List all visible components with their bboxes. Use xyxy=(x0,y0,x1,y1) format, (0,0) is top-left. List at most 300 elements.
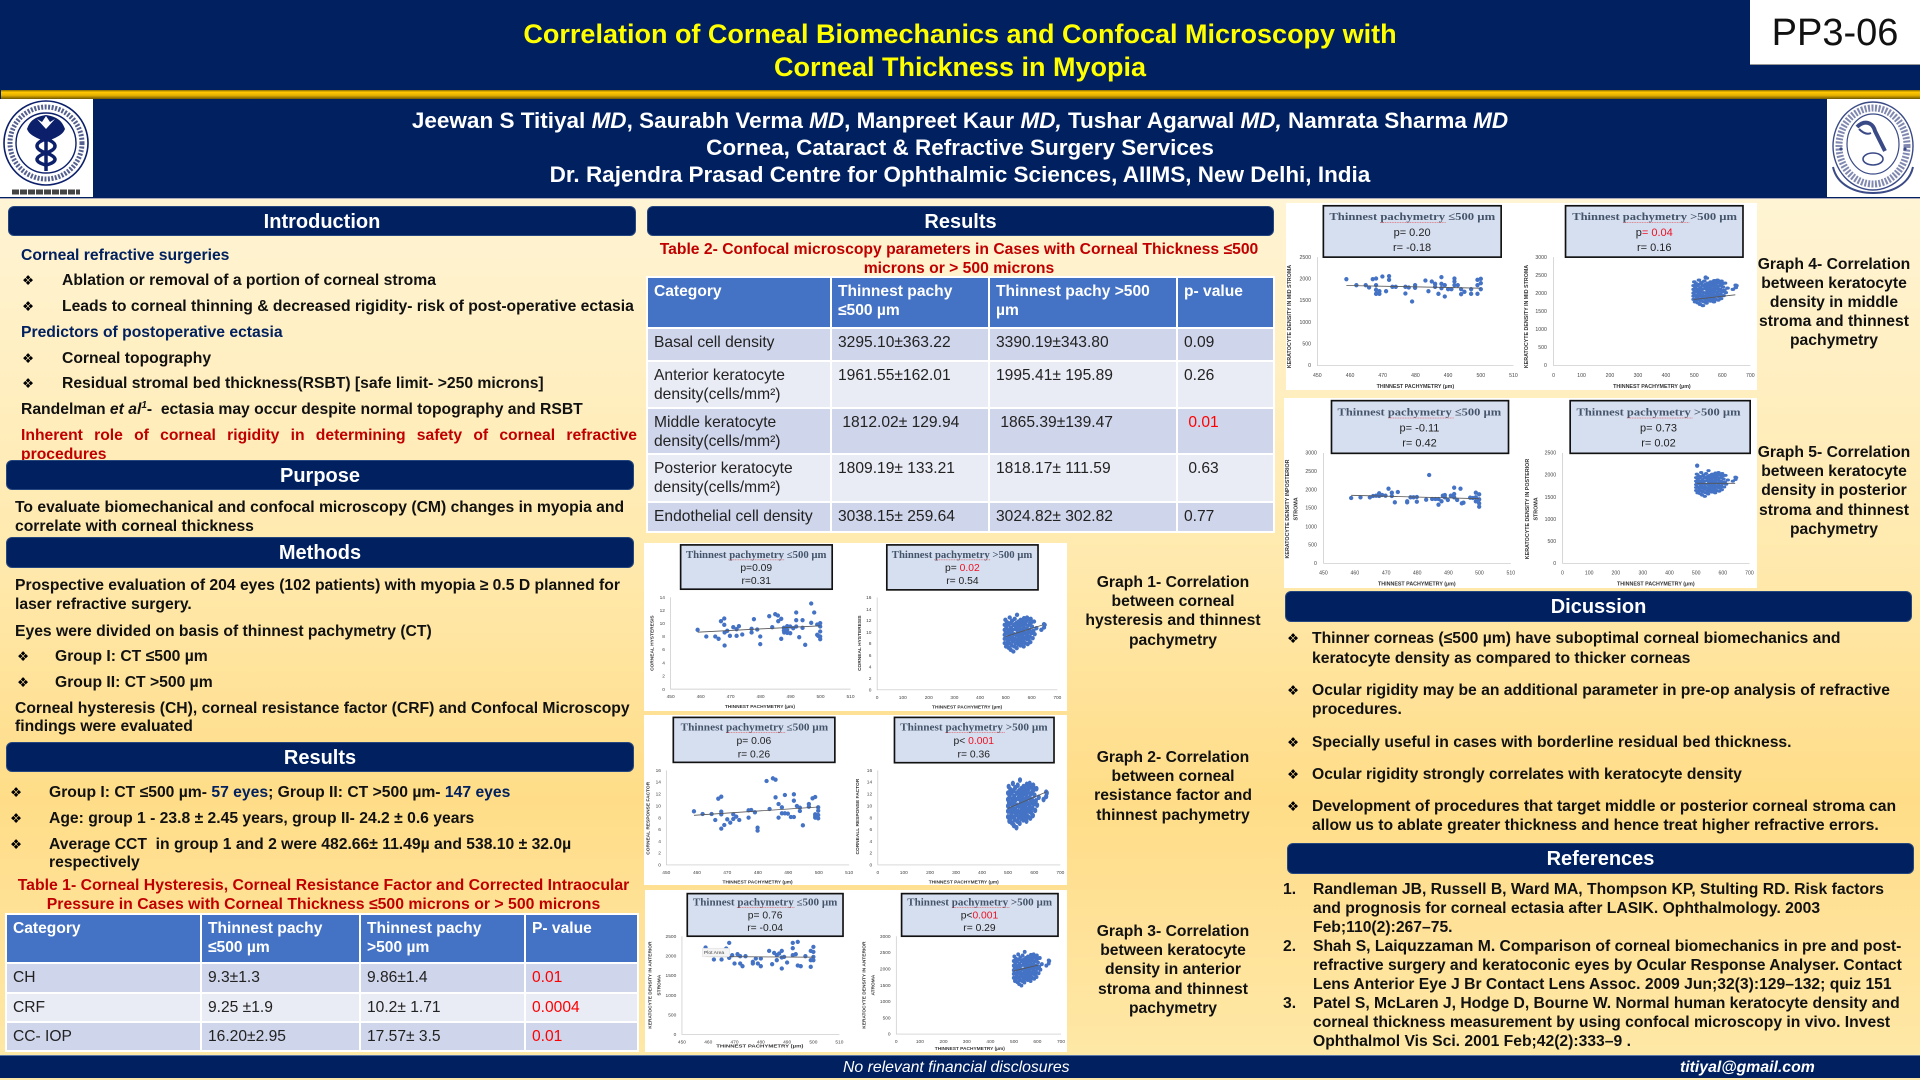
graph 3 left axes: STROMA xyxy=(656,974,662,996)
graph 5 left axes: STROMA xyxy=(1294,497,1300,521)
table 1: 16.20±2.95 xyxy=(208,1028,286,1045)
text block: references: Feb;110(2):267–75. xyxy=(1313,919,1453,936)
graph 1 right axes: 4 xyxy=(869,664,872,670)
graph 3 left axes: 500 xyxy=(809,1039,818,1045)
graph 5 left axes: 3000 xyxy=(1305,451,1317,457)
graph 1 right axes: 8 xyxy=(869,641,872,647)
text block: discussion: Specially useful in cases with borderline residual bed thickness. xyxy=(1312,734,1792,751)
graph 5 right axes: 2500 xyxy=(1545,451,1556,457)
graph 5 left axes: 500 xyxy=(1475,570,1484,576)
disclosure note: No relevant financial disclosures xyxy=(843,1059,1070,1076)
graph 1 right axes: 0 xyxy=(869,687,872,693)
graph 1 left axes: 470 xyxy=(727,694,735,700)
graph 5 right axes: THINNEST PACHYMETRY (µm) xyxy=(1617,581,1695,587)
graph 2 caption: between corneal xyxy=(1112,768,1234,785)
graph 3 left axes: 460 xyxy=(704,1039,713,1045)
graph 5 left axes: 450 xyxy=(1319,570,1328,576)
graph 5 right axes: 600 xyxy=(1719,570,1727,576)
graph 1 right axes: 200 xyxy=(925,695,933,701)
graph 5 left stats box: r= 0.42 xyxy=(1402,438,1437,450)
graph 2 left axes xyxy=(645,768,854,886)
text block: discussion: ❖ xyxy=(1287,683,1299,699)
graph 5 left stats box: Thinnest pachymetry ≤500 µm xyxy=(1338,407,1501,419)
authors and affiliation xyxy=(412,108,1508,187)
graph 1 right axes: 100 xyxy=(899,695,907,701)
heading: Results middle: Results xyxy=(924,211,997,233)
graph 4 right stats box: r= 0.16 xyxy=(1637,242,1672,254)
table 2 caption: microns or > 500 microns xyxy=(864,260,1054,277)
title: Corneal Thickness in Myopia xyxy=(774,52,1146,82)
heading: References xyxy=(1287,843,1914,874)
graph 4 right axes: 1500 xyxy=(1535,309,1547,315)
graph 2 right axes: 200 xyxy=(926,870,934,876)
text block: results xyxy=(10,784,571,871)
graph 5 caption: stroma and thinnest xyxy=(1759,502,1909,519)
graph 2 left axes: 470 xyxy=(723,870,732,876)
heading: Methods xyxy=(6,537,634,568)
graph 2 right stats box: r= 0.36 xyxy=(958,749,990,760)
graph 4 right axes: 200 xyxy=(1606,373,1614,379)
graph 4 left stats box xyxy=(1323,206,1501,257)
graph 5 right axes: 1000 xyxy=(1545,517,1556,523)
graph 4 right axes: 500 xyxy=(1538,345,1547,351)
graph 5 right axes: 0 xyxy=(1561,570,1564,576)
graph 1 left stats box: p=0.09 xyxy=(740,563,772,574)
graph 4 right stats box xyxy=(1566,206,1743,257)
text block: discussion: ❖ xyxy=(1287,735,1299,751)
graph 1 left axes: 8 xyxy=(662,634,665,640)
text block: results: ❖ xyxy=(10,837,22,853)
text block: introduction: Ablation or removal of a portion of corneal stroma xyxy=(62,272,436,289)
graph 4 caption: between keratocyte xyxy=(1761,275,1907,292)
graph 4 left stats box: r= -0.18 xyxy=(1393,242,1431,254)
graph 2 right axes: 4 xyxy=(869,839,872,845)
table 1 xyxy=(5,913,639,1052)
graph 2 left axes: 450 xyxy=(662,870,671,876)
graph 3 caption: stroma and thinnest xyxy=(1098,981,1248,998)
graph 4 caption: density in middle xyxy=(1770,294,1898,311)
graph 2 right axes: 2 xyxy=(869,851,872,857)
graph 3 caption: density in anterior xyxy=(1105,961,1241,978)
graph 3 right axes: 2500 xyxy=(880,950,891,956)
title xyxy=(523,19,1397,82)
graph 4 left axes: KERATOCYTE DENSITY IN MID STROMA xyxy=(1287,265,1293,368)
graph 4 left axes: 460 xyxy=(1346,373,1354,379)
graph 3 right stats box: Thinnest pachymetry >500 µm xyxy=(907,898,1053,909)
graph 5 right axes: 500 xyxy=(1692,570,1701,576)
graph 4 right axes: THINNEST PACHYMETRY (µm) xyxy=(1613,384,1691,390)
graph 3 panel xyxy=(645,890,1067,1052)
graph 3 caption: between keratocyte xyxy=(1100,942,1246,959)
graph 4 left stats box: Thinnest pachymetry ≤500 µm xyxy=(1329,211,1495,223)
graph 1 right axes: 12 xyxy=(866,618,872,624)
graph 5 right stats box: r= 0.02 xyxy=(1641,438,1676,450)
graph 4 left scatter xyxy=(1346,276,1481,302)
graph 1 left axes: 480 xyxy=(757,694,765,700)
graph 2 left axes: 14 xyxy=(656,780,661,786)
text block: references: corneal thickness measurement by using confocal microscopy in vivo. Invest xyxy=(1313,1014,1890,1031)
table 1: >500 µm xyxy=(367,939,429,956)
text block: references: refractive surgery and keratoconic eyes by Ocular Response Analyser. Contact xyxy=(1313,957,1902,974)
graph 2 left stats box: p= 0.06 xyxy=(737,736,772,747)
graph 1 right axes xyxy=(857,595,1062,710)
graph 3 right axes: 300 xyxy=(963,1039,971,1045)
heading: Purpose: Purpose xyxy=(280,465,360,487)
graph 1 right axes: 6 xyxy=(869,653,872,659)
graph 2 caption: Graph 2- Correlation xyxy=(1097,749,1249,766)
text block: discussion: Thinner corneas (≤500 µm) have suboptimal corneal biomechanics and xyxy=(1312,630,1841,647)
graph 1 left axes: 14 xyxy=(660,595,665,601)
graph 2 left axes: 12 xyxy=(656,792,661,798)
graph 3 caption: pachymetry xyxy=(1129,1000,1217,1017)
graph 1 right axes: 600 xyxy=(1028,695,1036,701)
graph 3 caption xyxy=(1097,923,1249,1017)
graph 3 left axes: KERATOCYTE DENSITY IN ANTERIOR xyxy=(647,941,653,1029)
graph 5 right axes xyxy=(1525,451,1754,587)
table 2: 0.01 xyxy=(1188,414,1219,431)
graph 2 left axes: 4 xyxy=(658,839,661,845)
authors and affiliation: Dr. Rajendra Prasad Centre for Ophthalmic Sciences, AIIMS, New Delhi, India xyxy=(550,162,1370,187)
text block: methods: Corneal hysteresis (CH), corneal resistance factor (CRF) and Confocal Microscopy xyxy=(15,700,630,717)
graph 4 caption xyxy=(1758,256,1910,349)
graph 1 left axes: 12 xyxy=(660,608,665,614)
text block: purpose: correlate with corneal thickness xyxy=(15,518,254,535)
table 1: 9.3±1.3 xyxy=(208,969,260,986)
text block: references xyxy=(1283,881,1902,1050)
graph 2 left axes: 10 xyxy=(656,803,661,809)
graph 3 right axes: ATROMA xyxy=(870,974,876,996)
graph 5 caption: between keratocyte xyxy=(1761,463,1907,480)
graph 5 left stats box: p= -0.11 xyxy=(1400,422,1439,434)
graph 3 left axes xyxy=(647,934,844,1045)
table 2: Basal cell density xyxy=(654,334,774,351)
graph 1 left axes: CORNEAL HYSTERESIS xyxy=(650,615,656,671)
graph 4 right axes: 500 xyxy=(1690,373,1699,379)
table 1 caption: Pressure in Cases with Corneal Thickness ≤500 microns or > 500 microns xyxy=(47,896,600,912)
graph 2 caption: thinnest pachymetry xyxy=(1096,807,1250,824)
graph 3 left stats box: Thinnest pachymetry ≤500 µm xyxy=(693,898,838,909)
graph 3 left axes: 2500 xyxy=(666,934,677,940)
graph 4 right stats box: Thinnest pachymetry >500 µm xyxy=(1572,211,1737,223)
heading: Results left: Results xyxy=(284,747,356,769)
logo: RP Centre emblem xyxy=(1827,99,1920,197)
graph 5 left axes: 2000 xyxy=(1305,487,1317,493)
graph 3 right axes: 0 xyxy=(888,1032,891,1038)
poster id box xyxy=(1750,0,1920,65)
text block: methods xyxy=(15,577,630,735)
text block: introduction xyxy=(21,247,637,460)
text block: introduction: ❖ xyxy=(22,273,34,289)
table 2: 1865.39±139.47 xyxy=(1000,414,1113,431)
heading: Results middle xyxy=(647,206,1274,236)
graph 4 left axes: 480 xyxy=(1411,373,1420,379)
text block: references: Lens Anterior Eye J Br Contact Lens Assoc. 2009 Jun;32(3):129–132; quiz 151 xyxy=(1313,976,1892,993)
title: Correlation of Corneal Biomechanics and Confocal Microscopy with xyxy=(523,19,1397,49)
graph 2 left stats box: Thinnest pachymetry ≤500 µm xyxy=(681,722,829,733)
graph 2 left axes: CORNEAL RESPONSE FACTOR xyxy=(645,781,651,855)
table 1: CRF xyxy=(13,999,45,1016)
text block: references: Patel S, McLaren J, Hodge D, Bourne W. Normal human keratocyte density and xyxy=(1313,995,1900,1012)
graph 3 left axes: 2000 xyxy=(666,954,677,960)
graph 4 right axes: 1000 xyxy=(1535,327,1547,333)
graph 4 left axes xyxy=(1287,255,1518,390)
gold divider bar xyxy=(1,90,1920,99)
table 2: 0.77 xyxy=(1184,508,1214,525)
graph 2 right axes: 6 xyxy=(869,827,872,833)
poster id box: PP3-06 xyxy=(1772,12,1898,54)
graph 3 right axes: 3000 xyxy=(880,934,891,940)
graph 1 right axes: 16 xyxy=(866,595,872,601)
graph 4 right axes: KERATOCYTE DENSITY IN MID STROMA xyxy=(1524,265,1530,368)
graph 3 left axes: 0 xyxy=(674,1032,677,1038)
graph 3 right axes: 200 xyxy=(940,1039,948,1045)
table 2: Category xyxy=(654,283,722,300)
graph 3 right axes: 500 xyxy=(1010,1039,1018,1045)
graph 5 right axes: 300 xyxy=(1639,570,1647,576)
graph 5 right axes: 700 xyxy=(1745,570,1754,576)
graph 3 plot area tooltip xyxy=(702,948,730,957)
text block: introduction: ❖ xyxy=(22,376,34,392)
table 1 caption xyxy=(18,877,630,912)
graph 5 right scatter xyxy=(1696,471,1736,496)
text block: discussion: procedures. xyxy=(1312,701,1402,718)
table 2 caption: Table 2- Confocal microscopy parameters in Cases with Corneal Thickness ≤500 xyxy=(660,241,1258,258)
graph 5 left scatter xyxy=(1351,475,1479,507)
graph 5 right axes: 0 xyxy=(1553,561,1556,567)
text block: introduction: Inherent role of corneal rigidity in determining safety of corneal refractive xyxy=(21,427,637,444)
graph 4 left axes: 510 xyxy=(1509,373,1518,379)
text block: results: Average CCT in group 1 and 2 were 482.66± 11.49µ and 538.10 ± 32.0µ xyxy=(49,836,571,853)
graph 1 right axes: 500 xyxy=(1002,695,1010,701)
graph 4 right axes: 600 xyxy=(1718,373,1727,379)
graph 2 left scatter xyxy=(694,778,818,831)
graph 4 panel xyxy=(1286,203,1757,390)
graph 2 left axes: 460 xyxy=(693,870,701,876)
table 2: 1818.17± 111.59 xyxy=(996,460,1111,477)
logo: AIIMS emblem xyxy=(0,99,93,197)
graph 1 caption: Graph 1- Correlation xyxy=(1097,574,1249,591)
graph 4 right axes: 100 xyxy=(1577,373,1586,379)
graph 4 right axes: 300 xyxy=(1634,373,1642,379)
graph 1 left axes: 4 xyxy=(662,660,665,666)
graph 1 right axes: 700 xyxy=(1053,695,1062,701)
text block: discussion: ❖ xyxy=(1287,767,1299,783)
table 1: 0.01 xyxy=(532,969,562,986)
graph 5 right stats box: Thinnest pachymetry >500 µm xyxy=(1576,407,1741,419)
graph 2 right axes xyxy=(855,768,1065,886)
text block: references: 3. xyxy=(1283,995,1296,1012)
header band xyxy=(0,0,1920,199)
graph 1 right axes: 10 xyxy=(866,630,872,636)
text block: discussion: ❖ xyxy=(1287,799,1299,815)
table 2: µm xyxy=(996,302,1019,319)
graph 2 right axes: 100 xyxy=(900,870,908,876)
graph 4 right axes: 400 xyxy=(1662,373,1670,379)
graph 4 left axes: 500 xyxy=(1302,342,1311,348)
graph 5 right axes: 2000 xyxy=(1545,473,1556,479)
graph 4 right axes xyxy=(1524,255,1755,390)
graph 2 right axes: 8 xyxy=(869,815,872,821)
graph 3 right stats box xyxy=(902,894,1058,936)
text block: discussion xyxy=(1287,630,1896,834)
text block: discussion: Ocular rigidity may be an additional parameter in pre-op analysis of refractive xyxy=(1312,682,1890,699)
table 2: Endothelial cell density xyxy=(654,508,813,525)
table 2: density(cells/mm²) xyxy=(654,479,780,496)
text block: introduction: Leads to corneal thinning & decreased rigidity- risk of post-operative ectasia xyxy=(62,298,634,315)
graph 5 right axes: KERATOCYTE DENSITY IN POSTERIOR xyxy=(1525,459,1531,559)
table 1: Category xyxy=(13,920,81,937)
graph 3 right stats box: p<0.001 xyxy=(961,911,998,922)
graph 5 panel xyxy=(1284,398,1757,588)
graph 3 left stats box: p= 0.76 xyxy=(748,911,783,922)
graph 5 right stats box: p= 0.73 xyxy=(1640,422,1677,434)
graph 2 left stats box xyxy=(673,717,835,762)
graph 5 left axes: 500 xyxy=(1308,543,1317,549)
graph 4 right scatter xyxy=(1694,278,1736,306)
table 1: CC- IOP xyxy=(13,1028,72,1045)
text block: introduction: Corneal refractive surgeries xyxy=(21,247,229,264)
text block: methods: laser refractive surgery. xyxy=(15,596,192,613)
graph 5 right axes: 400 xyxy=(1665,570,1674,576)
table 2 caption xyxy=(660,241,1258,277)
graph 2 right scatter xyxy=(1008,780,1047,828)
table 1: 9.25 ±1.9 xyxy=(208,999,273,1016)
table 2: 1809.19± 133.21 xyxy=(838,460,955,477)
table 2: density(cells/mm²) xyxy=(654,386,780,403)
table 2: 0.63 xyxy=(1188,460,1219,477)
graph 1 right axes: 0 xyxy=(876,695,879,701)
graph 3 right axes: 0 xyxy=(895,1039,898,1045)
text block: references: Randleman JB, Russell B, Ward MA, Thompson KP, Stulting RD. Risk factors xyxy=(1313,881,1884,898)
graph 4 left axes: 500 xyxy=(1476,373,1485,379)
graph 4 right axes: 0 xyxy=(1552,373,1555,379)
text block: references: 2. xyxy=(1283,938,1296,955)
graph 5 left axes: 1000 xyxy=(1305,524,1317,530)
graph 5 right axes: 1500 xyxy=(1545,495,1556,501)
text block: results: Group I: CT ≤500 µm- 57 eyes; Group II: CT >500 µm- 147 eyes xyxy=(49,784,510,801)
text block: introduction: Randelman et al1- ectasia may occur despite normal topography and RSBT xyxy=(21,400,583,418)
graph 1 right axes: 14 xyxy=(866,607,872,613)
graph 3 left stats box: r= -0.04 xyxy=(747,923,783,934)
graph 1 left stats box xyxy=(681,545,832,589)
graph 2 panel xyxy=(644,715,1067,885)
table 1: Thinnest pachy xyxy=(367,920,481,937)
text block: methods: Group I: CT ≤500 µm xyxy=(55,648,208,665)
graph 2 left axes: 0 xyxy=(658,863,661,869)
text block: purpose: To evaluate biomechanical and confocal microscopy (CM) changes in myopia and xyxy=(15,499,624,516)
graph 1 right stats box xyxy=(887,545,1038,590)
graph 1 right stats box: r= 0.54 xyxy=(946,576,979,587)
text block: discussion: ❖ xyxy=(1287,631,1299,647)
graph 1 left axes xyxy=(650,595,855,710)
graph 5 left axes: KERATOCYTE DENSITY INPOSTERIOR xyxy=(1285,459,1291,558)
table 2: 0.09 xyxy=(1184,334,1214,351)
graph 4 left stats box: p= 0.20 xyxy=(1394,227,1431,239)
graph 2 right axes: 400 xyxy=(978,870,986,876)
text block: introduction: ❖ xyxy=(22,299,34,315)
text block: references: 1. xyxy=(1283,881,1296,898)
text block: methods: ❖ xyxy=(17,649,29,665)
heading: Methods: Methods xyxy=(279,542,361,564)
graph 5 left axes: 1500 xyxy=(1305,506,1317,512)
graph 1 left axes: 490 xyxy=(787,694,795,700)
graph 1 left axes: 510 xyxy=(846,694,855,700)
graph 5 left axes: 0 xyxy=(1314,561,1317,567)
graph 3 right axes: 1000 xyxy=(880,999,891,1005)
graph 5 left axes: 510 xyxy=(1507,570,1515,576)
graph 2 right axes: 10 xyxy=(867,803,872,809)
graph 1 left stats box: Thinnest pachymetry ≤500 µm xyxy=(686,550,827,561)
heading: Introduction: Introduction xyxy=(264,211,380,233)
graph 1 left axes: THINNEST PACHYMETRY (µm) xyxy=(725,704,795,710)
graph 1 left axes: 10 xyxy=(660,621,665,627)
graph 3 right axes: 2000 xyxy=(880,967,891,973)
text block: discussion: allow us to ablate greater thickness and hence treat higher refractive errors. xyxy=(1312,817,1879,834)
graph 3 left x-axis title: THINNEST PACHYMETRY (µm) xyxy=(716,1044,804,1050)
graph 5 caption xyxy=(1758,444,1910,538)
graph 2 left axes: 16 xyxy=(656,768,661,774)
graph 2 right axes: 0 xyxy=(869,863,872,869)
graph 1 left scatter xyxy=(698,604,820,645)
text block: introduction: ❖ xyxy=(22,351,34,367)
heading: Discussion xyxy=(1285,591,1912,622)
table 1: 0.0004 xyxy=(532,999,580,1016)
graph 1 caption xyxy=(1085,574,1261,649)
graph 4 left axes: 2000 xyxy=(1300,276,1311,282)
graph 2 caption xyxy=(1094,749,1252,824)
graph 3 left axes: 500 xyxy=(668,1012,677,1018)
graph 4 caption: pachymetry xyxy=(1790,332,1878,349)
text block: references: Ophthalmol Vis Sci. 2001 Feb;42(2):333–9 . xyxy=(1313,1033,1631,1050)
text block: results: ❖ xyxy=(10,811,22,827)
graph 3 left axes: 470 xyxy=(731,1039,739,1045)
graph 5 left axes: 490 xyxy=(1444,570,1453,576)
table 1: 9.86±1.4 xyxy=(367,969,428,986)
graph 5 left axes: 470 xyxy=(1382,570,1391,576)
table 2: Posterior keratocyte xyxy=(654,460,793,477)
heading: References: References xyxy=(1547,848,1654,870)
graph 3 right axes: 400 xyxy=(986,1039,995,1045)
graph 4 left axes: THINNEST PACHYMETRY (µm) xyxy=(1377,384,1454,390)
graph 5 caption: pachymetry xyxy=(1790,521,1878,538)
graph 2 right axes: 300 xyxy=(952,870,960,876)
table 2: 1961.55±162.01 xyxy=(838,367,951,384)
graph 5 left axes xyxy=(1285,451,1515,587)
graph 2 right axes: 600 xyxy=(1030,870,1039,876)
text block: introduction: Predictors of postoperative ectasia xyxy=(21,324,283,341)
table 1: P- value xyxy=(532,920,592,937)
graph 3 right stats box: r= 0.29 xyxy=(963,923,996,934)
graph 1 caption: hysteresis and thinnest xyxy=(1085,612,1261,629)
authors and affiliation: Cornea, Cataract & Refractive Surgery Services xyxy=(706,135,1214,160)
graph 2 left axes: 6 xyxy=(658,827,661,833)
graph 3 right scatter xyxy=(1014,952,1049,986)
table 1: Thinnest pachy xyxy=(208,920,322,937)
graph 3 right axes: 1500 xyxy=(880,983,891,989)
graph 3 right axes: KERATOCYTE DENSITY IN ANTERIOR xyxy=(861,941,867,1029)
graph 3 right axes: 700 xyxy=(1057,1039,1065,1045)
table 2: 1812.02± 129.94 xyxy=(842,414,959,431)
graph 1 right stats box: p= 0.02 xyxy=(945,563,980,574)
graph 4 right axes: 2500 xyxy=(1535,273,1547,279)
graph 4 left axes: 1500 xyxy=(1300,298,1311,304)
text block: introduction: Corneal topography xyxy=(62,350,211,367)
text block: methods: Eyes were divided on basis of thinnest pachymetry (CT) xyxy=(15,623,432,640)
graph 2 left axes: 490 xyxy=(784,870,793,876)
text block: methods: Prospective evaluation of 204 eyes (102 patients) with myopia ≥ 0.5 D planned for xyxy=(15,577,620,594)
graph 1 right scatter xyxy=(1005,615,1045,651)
graph 1 right axes: THINNEST PACHYMETRY (µm) xyxy=(932,704,1003,710)
